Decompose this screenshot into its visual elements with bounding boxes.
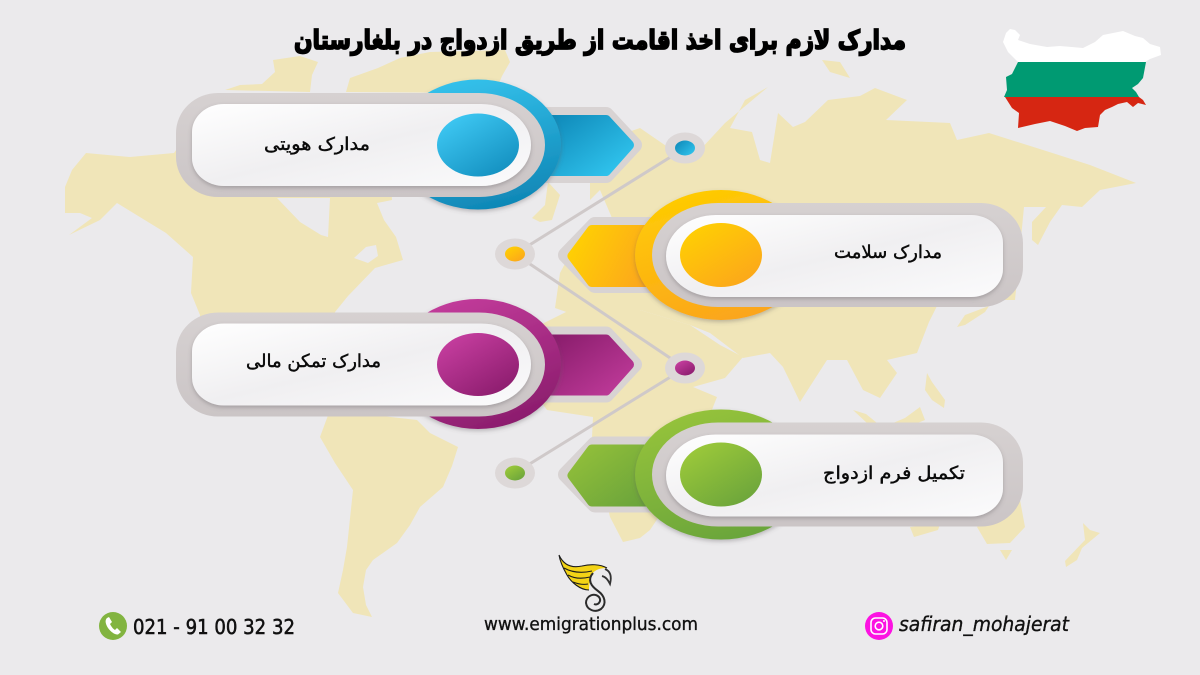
- map: Arctic islands: [225, 56, 318, 92]
- website: www.emigrationplus.com: [484, 614, 698, 635]
- node: green: [495, 458, 535, 488]
- panel: identity documents: مدارک هویتی: [264, 134, 370, 155]
- map: Indonesia: [853, 407, 925, 424]
- logo: [559, 555, 611, 611]
- title: مدارک لازم برای اخذ اقامت از طریق ازدواج در بلغارستان: [294, 26, 906, 56]
- map: Philippines: [925, 373, 945, 408]
- connector lines: [515, 148, 685, 473]
- map: Australia: [910, 500, 1025, 544]
- world map: [65, 50, 1136, 617]
- panel: marriage form: تکمیل فرم ازدواج: [823, 463, 965, 484]
- instagram handle: safiran_mohajerat: [899, 612, 1070, 636]
- map: Tasmania: [1000, 550, 1012, 560]
- icon: instagram: [865, 612, 893, 640]
- logo: wing: [559, 555, 607, 590]
- node: purple: [665, 352, 705, 384]
- icon: phone: [99, 612, 127, 640]
- map: North America: [65, 120, 403, 410]
- logo: S swirl: [586, 573, 605, 611]
- panel: health documents: مدارک سلامت: [834, 242, 942, 263]
- map: Hudson Bay: [277, 198, 330, 237]
- logo: wing feathers: [559, 555, 607, 590]
- map: Africa: [525, 310, 743, 542]
- panel: financial documents: [176, 299, 634, 429]
- node: blue: [665, 132, 705, 164]
- panel: financial documents: مدارک تمکن مالی: [246, 351, 381, 372]
- map: Gulf of St Lawrence: [354, 245, 378, 263]
- map: British Isles: [532, 182, 560, 222]
- phone number: 021 - 91 00 32 32: [133, 615, 295, 639]
- map: South America: [320, 410, 458, 617]
- map: Greenland: [346, 50, 510, 93]
- map: Europe and Asia: [555, 87, 1136, 402]
- map: Japan: [957, 306, 989, 327]
- logo: bird head: [602, 569, 611, 584]
- node: orange: [495, 238, 535, 270]
- map: Novaya Zemlya: [822, 60, 850, 78]
- map: New Zealand: [1065, 523, 1100, 567]
- panel: health documents: [566, 190, 1023, 320]
- panel: marriage form: [566, 410, 1023, 540]
- panel: identity documents: [176, 80, 634, 210]
- icon: Bulgaria flag map: [1003, 29, 1161, 131]
